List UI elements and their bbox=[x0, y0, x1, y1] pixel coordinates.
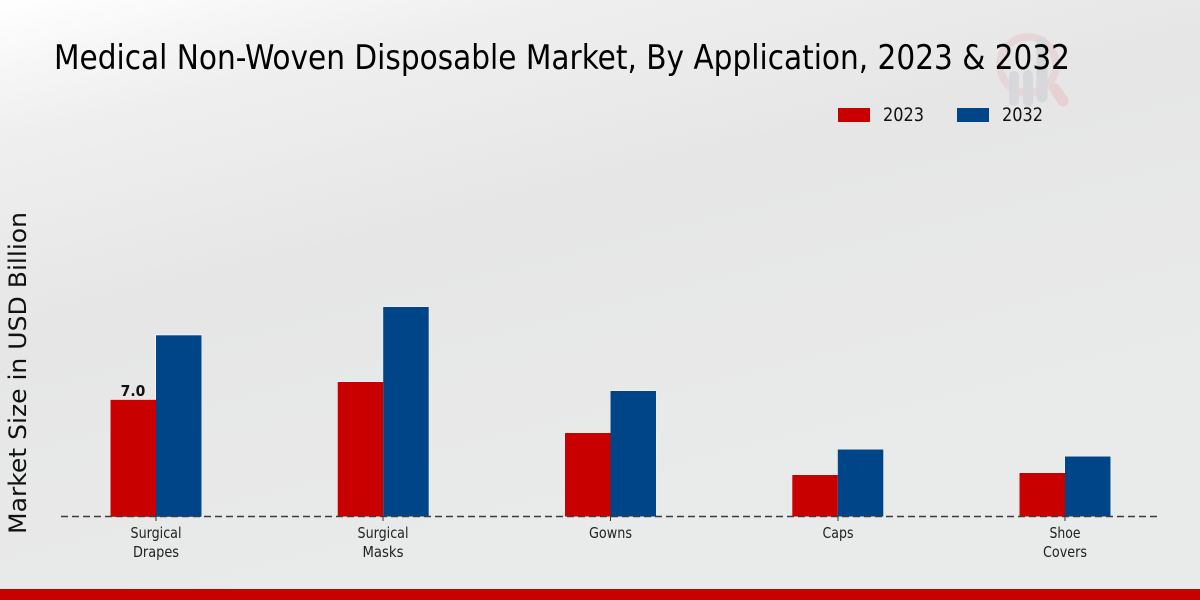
x axis labels: Surgical bbox=[130, 524, 182, 542]
legend: 2032 bbox=[957, 105, 1043, 126]
x axis labels: Gowns bbox=[589, 524, 632, 542]
x axis labels bbox=[130, 516, 1087, 561]
x axis labels: Surgical bbox=[358, 524, 408, 542]
x axis labels: Shoe bbox=[1050, 524, 1080, 542]
category: Caps bbox=[792, 449, 884, 516]
x axis baseline bbox=[61, 516, 1160, 518]
icon: watermark logo bbox=[1000, 37, 1063, 102]
title: Medical Non-Woven Disposable Market, By Application, 2023 & 2032 bbox=[54, 38, 1070, 78]
category: Shoe Covers bbox=[1019, 456, 1111, 516]
legend: 2023 bbox=[838, 105, 924, 126]
y axis label: Market Size in USD Billion bbox=[4, 212, 32, 534]
legend: 2023: 2023 bbox=[883, 105, 924, 126]
category: Surgical Masks bbox=[337, 306, 429, 516]
x axis labels: Covers bbox=[1043, 543, 1087, 561]
x axis labels: Caps bbox=[822, 524, 854, 542]
category: Surgical Drapes: 7.0 bbox=[121, 382, 146, 400]
legend: 2032: 2032 bbox=[1002, 105, 1043, 126]
legend bbox=[838, 105, 1043, 126]
x axis labels: Masks bbox=[362, 543, 404, 561]
category: Gowns bbox=[564, 390, 656, 516]
category: Surgical Drapes bbox=[110, 334, 202, 517]
footer bar bbox=[0, 589, 1200, 600]
x axis labels: Drapes bbox=[133, 543, 179, 561]
bar chart bbox=[110, 306, 1111, 517]
